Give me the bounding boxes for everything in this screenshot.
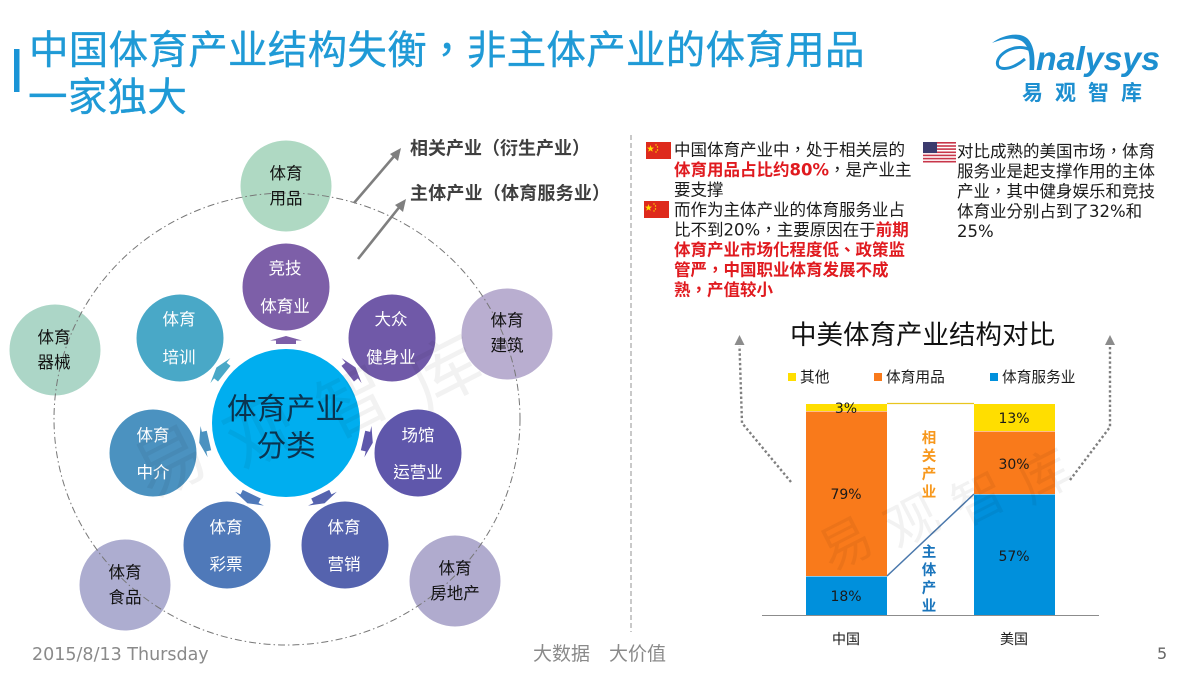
text block: US market: 对比成熟的美国市场，体育 [957,138,1155,162]
inner circle: agency [110,410,196,496]
axis [762,614,1099,616]
label: core industry (vertical) [922,543,937,615]
inner circle: training: 培训 [162,348,196,367]
panel: industry classification diagram [10,140,552,645]
text block: US market: 产业，其中健身娱乐和竞技 [957,178,1155,202]
inner circle: competitive sports [242,244,330,330]
outer ring labels: 建筑 [490,336,524,355]
legend [788,369,1075,386]
inner circle: marketing [302,502,388,588]
title accent bar [14,49,20,92]
outer ring labels: 体育 [270,164,302,183]
footer date: 2015/8/13 Thursday [32,645,209,665]
outer ring labels: 体育 [490,311,524,330]
text block: China core layer: 熟，产值较小 [674,276,774,300]
text block: US market: 服务业是起支撑作用的主体 [957,162,1156,181]
watermark: right [810,439,1082,584]
footer slogan: 大数据 大价值 [533,643,666,665]
text block: China core layer: 管严，中国职业体育发展不成 [674,256,888,280]
icon: China flag 1 [646,142,671,159]
bar: USA: 57% [998,549,1030,565]
text block: China related layer: 中国体育产业中，处于相关层的 [674,136,905,160]
vertical dashed divider [630,135,632,632]
outer ring labels: 器械 [38,353,70,372]
dotted arrow: right [1070,335,1115,480]
label: related industry: 相关产业（衍生产业） [410,134,590,160]
inner circle: mass fitness: 大众 [374,310,408,329]
inner circle: marketing: 体育 [328,518,360,537]
label: core industry (vertical): 产 [922,580,936,597]
axis labels [832,632,1028,648]
stacked bar chart [762,401,1099,648]
inner circle: competitive sports: 竞技 [268,259,302,278]
title: 一家独大 [28,75,187,121]
text block: China core layer: 体育产业市场化程度低、政策监 [674,240,905,260]
outer ring labels: 用品 [270,189,302,208]
inner circle: training: 体育 [162,310,196,329]
bar: China [806,401,887,615]
arrow: to core industry [358,199,406,259]
label: related industry (vertical): 关 [922,448,937,465]
bar: China: 18% [830,589,862,605]
watermark: right: 观 [876,484,949,561]
label: core industry (vertical): 主 [922,543,936,561]
outer ring labels: 体育 [108,563,142,582]
outer ring labels: 食品 [108,588,142,607]
outer ring labels: 体育 [38,328,70,347]
legend: 体育用品 [886,369,945,386]
small arrows around center [196,336,376,510]
icon: US flag [923,142,956,162]
chart title: 中美体育产业结构对比 [790,320,1055,351]
label: core industry (vertical): 业 [922,598,936,615]
inner circle: lottery: 体育 [210,518,242,537]
watermark: left: 库 [395,320,495,425]
dash-dot boundary ring [54,193,520,645]
dotted arrow: left [734,335,791,482]
inner circle: lottery: 彩票 [210,555,242,574]
connectors [887,402,974,404]
watermark: left: 智 [303,350,403,455]
inner circle: marketing: 营销 [328,555,360,574]
text block: China core layer: 比不到20%，主要原因在于前期 [674,216,909,240]
bar: China: 79% [830,487,862,503]
outer ring labels [38,164,524,607]
legend: 体育服务业 [1002,369,1075,386]
bar: USA: 30% [998,457,1030,473]
label: core industry (vertical): 体 [922,562,937,579]
text block: China core layer: 而作为主体产业的体育服务业占 [674,200,905,220]
logo: 易观智库 [1022,81,1154,105]
watermark: left: 观 [212,380,312,485]
inner circle: lottery [184,502,270,588]
watermark: right: 库 [1009,439,1082,516]
inner circle: training [136,294,224,382]
text block: China core layer [674,200,909,300]
title [28,19,865,121]
outer ring: related-industry circles [10,140,552,630]
watermark: right: 智 [943,462,1016,539]
outer ring labels: 体育 [438,559,472,578]
title: 中国体育产业结构失衡，非主体产业的体育用品 [29,19,865,76]
bar: USA: 13% [998,411,1030,427]
center circle: 分类 [256,429,316,463]
text block: US market: 25% [957,222,994,241]
axis labels: 美国 [1000,632,1028,648]
watermark: left [120,320,495,515]
inner circle: mass fitness: 健身业 [366,348,416,367]
bar: China: 3% [835,401,857,417]
icon: China flag 2 [644,201,669,218]
bar: USA [974,404,1055,615]
inner circle: competitive sports: 体育业 [260,297,310,316]
text block: US market: 体育业分别占到了32%和 [957,202,1142,221]
text block: China related layer [674,136,912,200]
inner circle: venues [374,410,462,496]
logo: nalysys [1036,40,1160,77]
watermark: right: 易 [810,507,883,584]
label: related industry (vertical): 产 [922,466,936,483]
axis labels: 中国 [832,632,860,648]
arrow: to related industry [354,148,401,203]
inner circle: venues: 运营业 [393,463,443,482]
page number: 5 [1157,644,1167,663]
watermark: left: 易 [120,410,220,515]
inner circle: agency: 体育 [136,426,170,445]
inner circle: agency: 中介 [136,463,170,482]
outer ring labels: 房地产 [430,584,480,603]
label: related industry (vertical) [922,430,937,501]
inner circle: venues: 场馆 [402,426,434,445]
inner circle: mass fitness [348,294,436,382]
legend: 其他 [800,369,830,386]
center circle: 体育产业 [227,392,345,426]
label: related industry (vertical): 相 [922,430,936,447]
text block: China related layer: 体育用品占比约80%，是产业主 [674,156,912,180]
label: core industry: 主体产业（体育服务业） [410,180,610,206]
logo [992,35,1160,105]
label: related industry (vertical): 业 [922,484,936,501]
center circle [212,349,360,497]
text block: US market [957,138,1156,241]
text block: China related layer: 要支撑 [674,180,724,200]
